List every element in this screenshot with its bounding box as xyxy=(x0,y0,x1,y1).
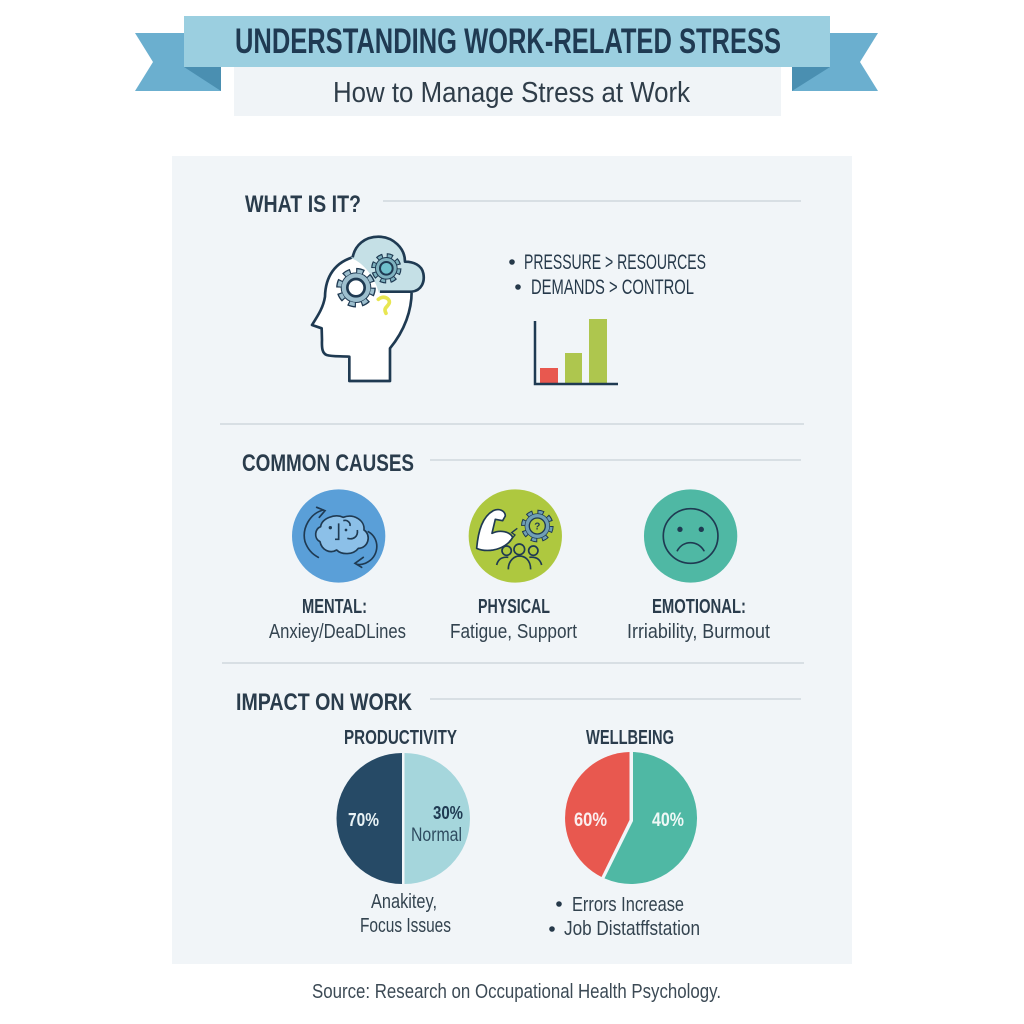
panel: physical cause: PHYSICAL xyxy=(478,596,550,618)
panel: wellbeing xyxy=(549,727,700,940)
text: productivity notes: Focus Issues xyxy=(360,915,451,937)
text: wellbeing bullets xyxy=(549,894,700,940)
bar chart xyxy=(535,319,618,384)
panel: wellbeing: WELLBEING xyxy=(586,727,674,749)
text: productivity notes: Anakitey, xyxy=(371,891,437,913)
pie chart: productivity: 70% xyxy=(348,809,379,830)
icon: brain with arrows xyxy=(292,489,385,583)
subtitle: How to Manage Stress at Work xyxy=(333,77,690,109)
panel: emotional cause: Irriability, Burmout xyxy=(627,621,770,643)
panel: physical cause: Fatigue, Support xyxy=(450,621,577,643)
panel: mental cause: Anxiey/DeaDLines xyxy=(269,621,406,643)
icon: head with gears and cloud xyxy=(312,237,424,381)
icon: sad face xyxy=(644,489,737,583)
pie chart: wellbeing xyxy=(565,752,697,884)
icon: small gear xyxy=(374,256,399,281)
title: UNDERSTANDING WORK-RELATED STRESS xyxy=(235,22,781,61)
heading: common causes: COMMON CAUSES xyxy=(242,450,414,477)
icon: arm, gear and people: ? xyxy=(534,522,540,533)
text: definition bullets xyxy=(509,251,706,299)
panel: productivity xyxy=(336,727,470,937)
text: wellbeing bullets: Errors Increase xyxy=(572,894,684,916)
heading: what is it: WHAT IS IT? xyxy=(245,191,361,218)
icon: yellow question mark xyxy=(378,297,389,313)
panel: mental cause xyxy=(269,489,406,643)
panel: emotional cause: EMOTIONAL: xyxy=(652,596,746,618)
heading: impact on work: IMPACT ON WORK xyxy=(236,689,413,716)
pie chart: wellbeing: 40% xyxy=(652,810,684,831)
text: wellbeing bullets: Job Distatffstation xyxy=(564,918,700,940)
title banner xyxy=(135,16,878,91)
panel: physical cause xyxy=(450,489,577,643)
icon: large gear xyxy=(339,271,373,304)
text: definition bullets: PRESSURE > RESOURCES xyxy=(524,251,706,274)
pie chart: productivity xyxy=(336,753,470,884)
pie chart: productivity: Normal xyxy=(411,825,462,846)
subtitle xyxy=(234,67,781,116)
panel: productivity: PRODUCTIVITY xyxy=(344,727,457,749)
icon: arm, gear and people xyxy=(469,489,562,583)
panel: main content background xyxy=(172,156,852,964)
panel: emotional cause xyxy=(627,489,770,643)
pie chart: wellbeing: 60% xyxy=(574,810,607,831)
text: productivity notes xyxy=(360,891,451,937)
source note: Source: Research on Occupational Health Psychology. xyxy=(312,981,721,1003)
text: definition bullets: DEMANDS > CONTROL xyxy=(531,276,694,299)
panel: mental cause: MENTAL: xyxy=(302,596,367,618)
pie chart: productivity: 30% xyxy=(433,802,463,823)
